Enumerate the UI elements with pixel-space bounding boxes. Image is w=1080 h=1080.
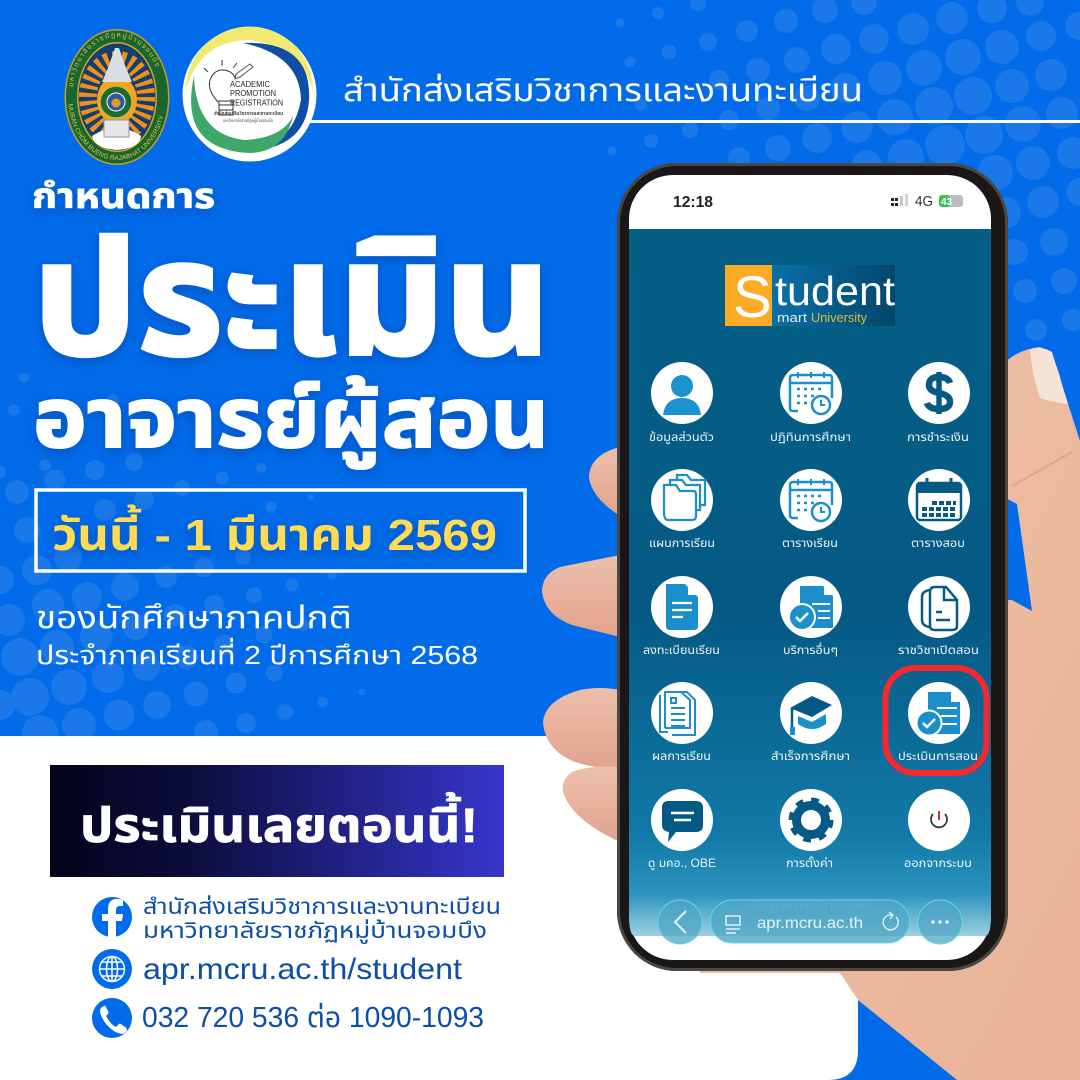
menu: class timetable: ตารางเรียน [782,537,838,550]
seal tower [102,48,132,82]
app background [629,229,991,936]
menu: logout: ออกจากระบบ [904,858,972,870]
contact: facebook: สำนักส่งเสริมวิชาการและงานทะเบียน [143,894,501,919]
menu: course registration: ลงทะเบียนเรียน [643,644,720,657]
academic promotion registration logo: PROMOTION [230,88,276,98]
halftone dots left [0,373,366,751]
menu: graduation: สำเร็จการศึกษา [771,749,850,763]
menu: personal info [649,362,714,444]
contact: website: apr.mcru.ac.th/student [143,953,463,986]
date box [36,490,525,571]
knuckle crease [1012,452,1072,486]
menu: logout [904,789,972,870]
browser address pill [710,900,910,943]
yellow crescent [186,27,313,90]
finger three [543,688,620,768]
status bar [673,194,963,211]
student logo: S [733,265,772,330]
header rule [305,120,1080,123]
menu: teaching evaluation [898,682,978,763]
status bar: 4G [915,194,933,210]
title: schedule: กำหนดการ [32,177,215,216]
menu: graduation [771,682,850,763]
phone body [617,163,1008,971]
seal ring text: มหาวิทยาลัยราชภัฏหมู่บ้านจอมบึง [69,32,159,86]
student logo [725,265,896,330]
status bar: 12:18 [673,194,713,211]
title block [32,177,551,469]
menu: teaching evaluation: ประเมินการสอน [898,751,978,763]
white lower panel [0,736,858,1080]
thumb nail [1030,348,1068,404]
contact: facebook: มหาวิทยาลัยราชภัฏหมู่บ้านจอมบึง [143,918,487,944]
academic promotion registration logo: REGISTRATION [230,98,283,108]
academic promotion registration logo: ACADEMIC [230,79,270,89]
menu: course registration [643,576,720,657]
status bar: 43 [941,197,953,208]
finger one [589,447,620,516]
phone [617,163,1008,971]
finger four [563,767,620,842]
contact: phone: 032 720 536 ต่อ 1090-1093 [142,1002,484,1034]
student type text: ของนักศึกษาภาคปกติ [36,600,352,635]
menu: exam timetable [908,469,970,550]
hand holding phone [542,347,1080,1080]
title: evaluate: ประเมิน [33,209,551,388]
seal base [92,128,141,150]
contact: website [92,949,463,989]
bulb icon [204,60,253,115]
student logo: University [811,310,867,325]
menu: academic calendar [770,362,851,444]
menu: study plan [649,469,715,550]
menu: grades: ผลการเรียน [652,750,711,763]
menu: exam timetable: ตารางสอบ [911,538,965,550]
phone screen [629,175,991,960]
menu: open courses [898,576,979,657]
header office name: สำนักส่งเสริมวิชาการและงานทะเบียน [343,72,863,108]
student logo: mart [777,310,807,325]
faded background label: ข้อมูลมหาวิทยาลัย [750,899,870,911]
red highlight around evaluation [886,668,986,773]
palm and thumb [700,347,1080,1080]
menu: other services [780,576,842,657]
call to action banner [50,765,504,877]
green crescent [191,76,293,153]
browser menu button [918,900,962,944]
menu: class timetable [780,469,842,550]
halftone dots top right [608,0,1080,341]
semester text: ประจำภาคเรียนที่ 2 ปีการศึกษา 2568 [36,637,478,670]
date text: วันนี้ - 1 มีนาคม 2569 [52,504,497,560]
menu: study plan: แผนการเรียน [649,537,715,550]
academic promotion registration logo: มหาวิทยาลัยราชภัฏหมู่บ้านจอมบึง [223,117,273,124]
menu: grades [651,682,713,763]
title: instructors: อาจารย์ผู้สอน [33,371,549,469]
student logo: tudent [775,268,896,314]
university seal logo [64,29,170,165]
menu: settings: การตั้งค่า [786,856,833,870]
academic promotion registration logo: สำนักส่งเสริมวิชาการและงานทะเบียน [214,109,283,117]
call to action text: ประเมินเลยตอนนี้! [80,792,478,853]
menu: course docs [648,789,716,870]
contact: facebook [92,894,501,944]
menu: payment [907,362,970,444]
menu: open courses: ราชวิชาเปิดสอน [898,645,979,657]
menu: academic calendar: ปฏิทินการศึกษา [770,431,851,444]
university seal logo: MUBAN CHOM BUENG RAJABHAT UNIVERSITY [68,104,164,160]
menu: personal info: ข้อมูลส่วนตัว [649,430,714,444]
blue crescent [216,43,309,151]
menu: payment: การชำระเงิน [907,431,969,444]
menu: course docs: ดู มคอ., OBE [648,858,716,870]
menu: settings [780,789,842,870]
finger two [542,555,620,637]
browser address pill: apr.mcru.ac.th [757,915,863,932]
contact: phone [92,998,484,1038]
browser back button [658,900,702,944]
menu: other services: บริการอื่นๆ [783,642,838,657]
academic promotion registration logo [182,27,316,162]
